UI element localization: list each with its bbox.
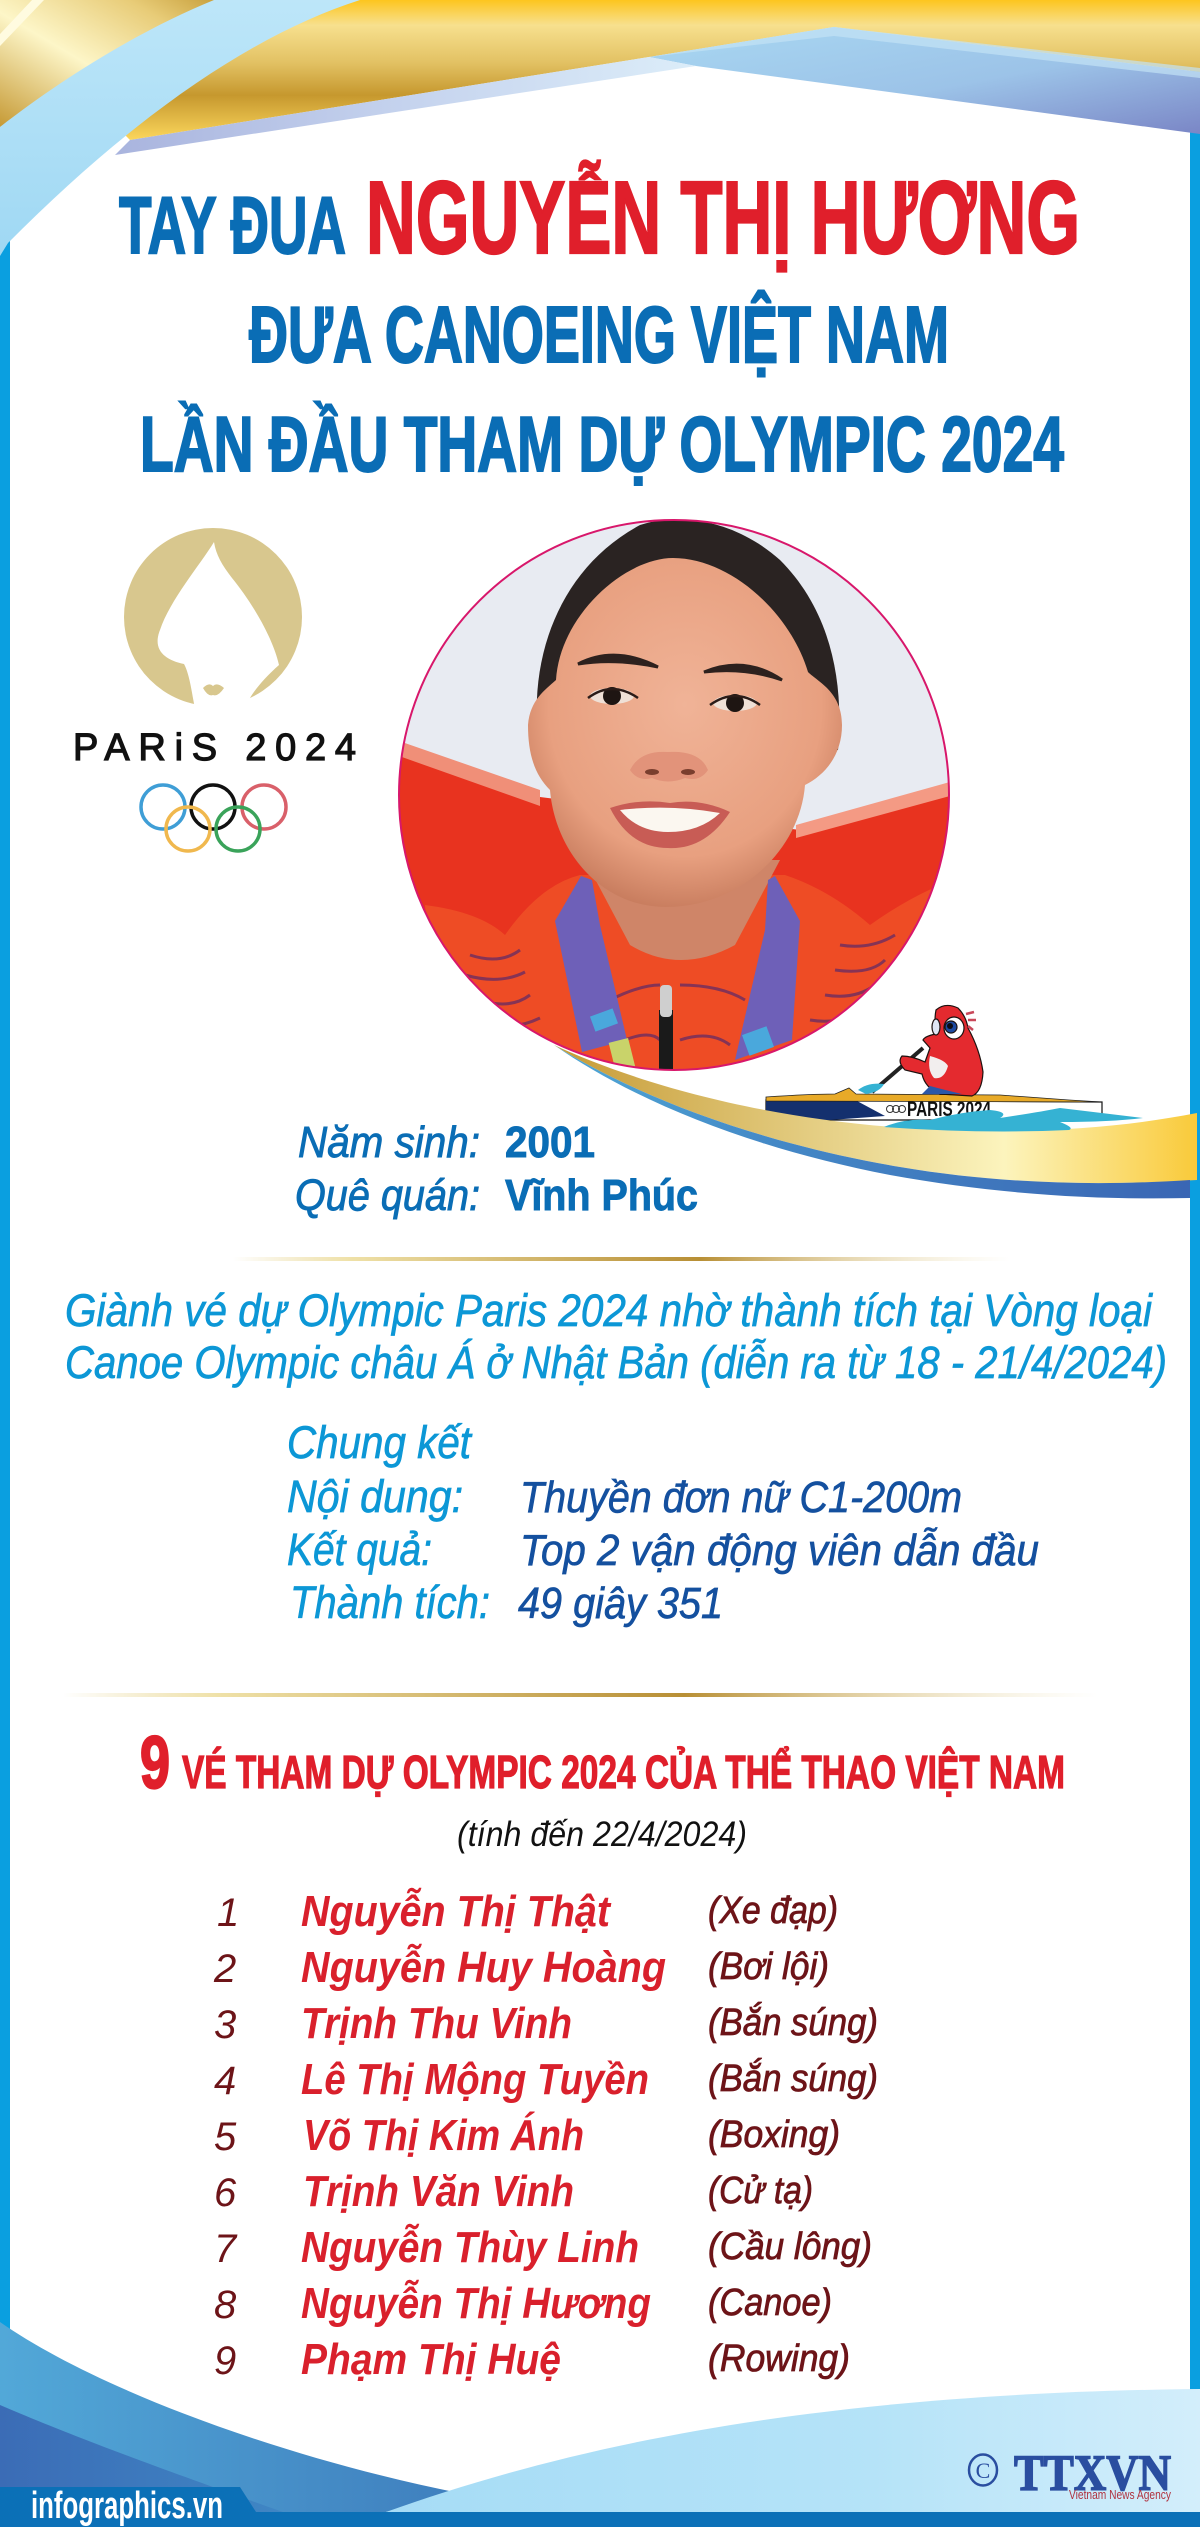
row: time: Thành tích: [290,1577,490,1628]
row 5: 5 [214,2115,237,2159]
mouth [610,801,730,848]
row: result [287,1524,1039,1575]
row 8: 8 [214,2283,237,2327]
row 3 [214,1999,878,2048]
row: result: Top 2 vận động viên dẫn đầu [520,1526,1039,1575]
title line 1: TAY ĐUA [119,181,346,271]
row 7 [214,2222,872,2272]
athlete portrait [399,519,950,1072]
row 7: 7 [214,2227,238,2271]
olympic rings [141,785,286,851]
row 3: (Bắn súng) [708,2001,878,2044]
row 8: (Canoe) [708,2282,832,2324]
row 2: Nguyễn Huy Hoàng [301,1942,666,1992]
eyes [590,688,634,704]
birth year: 2001 [505,1118,595,1167]
flag [400,757,948,935]
qualification text [65,1285,1167,1388]
row 1: 1 [217,1891,239,1935]
final results [287,1417,1039,1628]
face [528,558,842,907]
jacket [425,875,950,1070]
row 2: 2 [213,1947,236,1991]
row 9: Phạm Thị Huệ [301,2335,561,2384]
logo: Paris 2024 [73,528,356,851]
row: event: Thuyền đơn nữ C1-200m [520,1473,962,1522]
row 6: (Cử tạ) [708,2170,813,2212]
water splash [858,1084,1143,1131]
row 7: (Cầu lông) [708,2226,872,2268]
lanyards [555,876,627,1052]
row 2 [213,1942,829,1992]
swoosh [554,1045,1197,1198]
row 6: Trịnh Văn Vinh [303,2167,574,2216]
row 4: 4 [214,2059,236,2103]
row: time: 49 giây 351 [518,1579,723,1628]
row 8: Nguyễn Thị Hương [301,2278,651,2328]
section heading [140,1721,1065,1804]
paddle [872,1048,923,1092]
row: event [287,1471,962,1522]
row: result: Kết quả: [287,1524,432,1575]
title [119,159,1080,488]
title line 1 [119,159,1080,275]
row 4 [214,2055,878,2104]
row 1: (Xe đạp) [708,1890,838,1932]
mascot [900,1005,983,1096]
birth year [298,1118,595,1167]
brows [578,655,658,667]
hair [537,519,839,750]
date note: (tính đến 22/4/2024) [457,1815,747,1854]
emblem [124,528,302,708]
row 5 [214,2110,840,2160]
row 4: Lê Thị Mộng Tuyền [301,2055,649,2104]
section heading: 9 [140,1721,170,1804]
zipper [659,1010,673,1070]
wordmark: PARiS 2024 [73,727,356,769]
mascot in canoe [766,1005,1102,1121]
agency initials: TTXVN [1014,2446,1171,2502]
row 8 [214,2278,832,2328]
heading: final: Chung kết [287,1417,473,1468]
hometown: Vĩnh Phúc [505,1171,698,1220]
row 3: 3 [214,2003,236,2047]
row: event: Nội dung: [287,1471,463,1522]
birth year: Năm sinh: [298,1118,480,1167]
row 5: Võ Thị Kim Ánh [303,2110,584,2160]
neck [585,860,780,960]
copyright mark: C [976,2458,990,2483]
hometown: Quê quán: [295,1171,480,1220]
nose [630,752,708,782]
row 2: (Bơi lội) [708,1946,829,1988]
top banner [0,0,1200,256]
row 1 [217,1886,838,1936]
row 4: (Bắn súng) [708,2057,878,2100]
website label: infographics.vn [31,2485,223,2527]
athletes list [213,1886,878,2384]
row 3: Trịnh Thu Vinh [301,1999,572,2048]
athlete bio [295,1118,698,1220]
row 5: (Boxing) [708,2114,840,2156]
row: time [290,1577,723,1628]
canoe hull: PARIS 2024 [907,1098,991,1121]
canoe hull [766,1088,1102,1121]
footer waves [0,2322,1200,2527]
row 7: Nguyễn Thùy Linh [301,2222,639,2272]
logo: TTXVN [969,2446,1171,2502]
row 6: 6 [214,2171,237,2215]
row 1: Nguyễn Thị Thật [301,1886,612,1936]
hometown [295,1171,698,1220]
copyright mark [969,2454,997,2486]
row 9: (Rowing) [708,2338,850,2380]
row 9 [214,2335,850,2384]
agency name: Vietnam News Agency [1069,2487,1171,2502]
row 6 [214,2167,813,2216]
row 9: 9 [214,2339,236,2383]
